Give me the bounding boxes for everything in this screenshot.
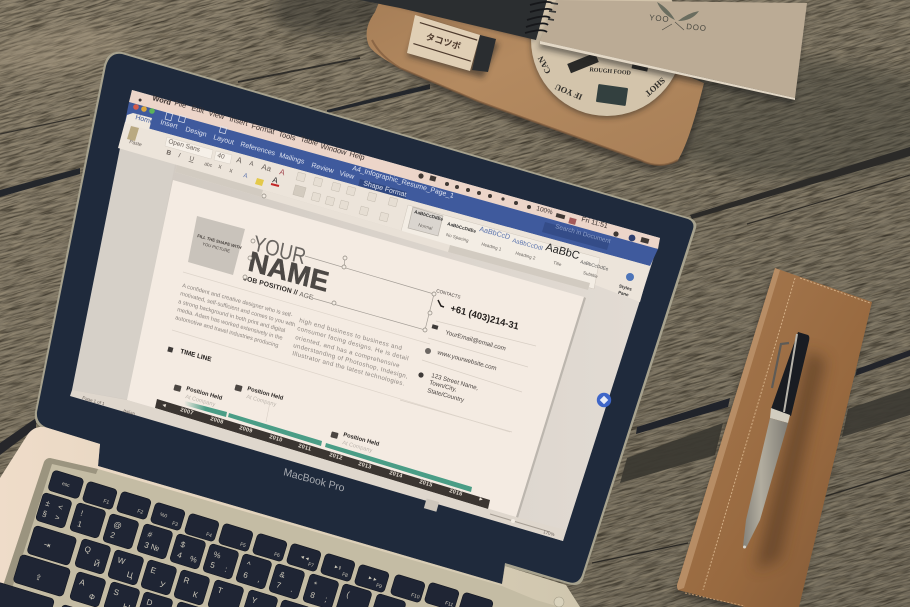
keyboard QWERTY row: У (159, 580, 167, 590)
ribbon toolbar: U (188, 155, 195, 163)
menu bar: Insert (228, 114, 250, 128)
keyboard number row (35, 492, 406, 607)
icon: eraser (407, 15, 499, 78)
blue ribbon title band: Design (184, 126, 207, 139)
intro paragraph right: oriented, and has a comprehensive (295, 334, 401, 370)
keyboard number row: 6 (242, 570, 250, 580)
status bar: 170% (543, 529, 555, 537)
coaster printed text: ROUGH FOOD (589, 67, 632, 77)
intro paragraph right (292, 317, 409, 388)
section heading: time line: TIME LINE (180, 348, 213, 364)
keyboard ASDF row: S (112, 587, 120, 598)
timeline chart: 2014 (388, 470, 404, 480)
name heading: AGE (299, 291, 314, 302)
photo placeholder: FILL THE SHAPE WITH (197, 233, 242, 250)
timeline chart (155, 384, 490, 509)
timeline positions: At Company (184, 394, 216, 408)
ribbon toolbar: Subtitle (582, 270, 599, 279)
intro paragraph left: automotive and travel industries producing (175, 315, 279, 349)
keyboard number row: % (189, 554, 198, 565)
keyboard number row: ( (345, 590, 351, 599)
keyboard number row: % (212, 550, 222, 560)
menu bar: Edit (190, 103, 206, 116)
ribbon toolbar: No Spacing (446, 232, 470, 243)
menu bar: Window (319, 141, 348, 157)
intro paragraph left: a strong background in both print and digital (178, 299, 286, 334)
photo placeholder (188, 216, 245, 275)
keyboard function row (47, 470, 494, 607)
menu bar: Table (299, 134, 319, 148)
keyboard QWERTY row: ⇥ (43, 540, 52, 550)
ribbon toolbar: A (271, 175, 280, 186)
contacts: www.yourwebsite.com (436, 349, 497, 372)
resume document content (155, 216, 536, 509)
blue ribbon title band: Search in Document (554, 223, 612, 245)
timeline chart: 2010 (268, 434, 283, 444)
panel: kraft card with logo (538, 0, 807, 105)
ribbon toolbar: AaBbCcDdEe (580, 259, 609, 272)
right page edge (516, 297, 586, 518)
ribbon toolbar: Home (134, 114, 154, 126)
menu bar (129, 90, 660, 249)
selection frame (243, 239, 436, 332)
keyboard QWERTY row: E (149, 565, 157, 576)
keyboard QWERTY row: Y (250, 595, 259, 606)
timeline chart: 2009 (238, 425, 253, 435)
contacts (400, 288, 536, 432)
contact dividers (400, 321, 536, 432)
status bar: Page 1 of 1 (82, 395, 106, 406)
ruler (175, 165, 590, 290)
keyboard number row: 7 (275, 580, 283, 590)
timeline positions: At Company (245, 394, 277, 408)
ribbon toolbar: Heading 1 (481, 241, 502, 252)
intro paragraph right: understanding of Photoshop, Indesign, (293, 342, 409, 380)
search box (542, 222, 610, 250)
keyboard function row: F5 (239, 542, 247, 549)
contacts: +61 (403)214-31 (449, 303, 520, 333)
timeline positions (173, 384, 380, 454)
ribbon toolbar: Title (553, 260, 563, 267)
intro paragraph right: high end business to business and (299, 317, 403, 352)
intro paragraph left: media. Adam has worked extensively in the (177, 307, 283, 342)
ribbon toolbar: A (235, 155, 244, 166)
timeline stem (266, 402, 270, 422)
keyboard number row: ± (44, 498, 52, 509)
menu bar: Fri 11:51 (580, 216, 609, 230)
keyboard shift row (0, 582, 91, 607)
keyboard function row: F2 (136, 508, 144, 516)
menu bar: File (173, 98, 188, 110)
ribbon toolbar: x (217, 163, 223, 171)
keyboard function row: F1 (102, 498, 110, 506)
ribbon toolbar: AaBbCcDdI (511, 238, 544, 252)
keyboard function row: F10 (410, 592, 420, 601)
keyboard QWERTY row: T (216, 585, 224, 596)
contacts: CONTACTS (436, 288, 461, 300)
intro paragraph left: A confident and creative designer who is self- (182, 283, 293, 319)
shape format tab (358, 179, 407, 200)
ribbon toolbar: B (165, 149, 172, 157)
icon: dropbox badge (597, 393, 611, 407)
name heading: YOUR (251, 230, 308, 269)
keyboard number row: & (278, 570, 287, 580)
keyboard function row: F9 (375, 583, 383, 590)
menu bar: Help (348, 149, 366, 162)
icon: black spiral notebook (338, 0, 547, 40)
intro paragraph right: Illustrator and the latest technologies. (292, 350, 405, 388)
keyboard number row: ; (324, 595, 328, 604)
status bar (70, 390, 566, 541)
left margin (72, 148, 175, 400)
timeline chart: ► (477, 496, 485, 504)
screen (72, 90, 660, 541)
keyboard function row: F4 (205, 532, 213, 539)
ribbon toolbar: AaBbC (544, 241, 581, 262)
keyboard number row: @ (112, 520, 123, 531)
keyboard number row: 1 (76, 519, 84, 529)
keyboard function row: F8 (341, 572, 349, 579)
timeline chart: 2007 (179, 407, 194, 417)
blue ribbon title band (125, 102, 658, 266)
keyboard number row: 5 (209, 560, 217, 570)
blue ribbon title band: View (338, 170, 356, 181)
menu bar: ● (138, 97, 142, 104)
keyboard QWERTY row (27, 525, 311, 607)
coaster printed text: CAN (535, 54, 553, 76)
timeline chart: 2011 (297, 443, 312, 453)
ribbon toolbar: AaBbCcDdEe (447, 221, 477, 234)
font box (165, 137, 213, 159)
timeline chart: 2012 (328, 452, 343, 462)
timeline chart: 2008 (209, 416, 224, 426)
icon: power button (554, 597, 564, 607)
paragraph tools (293, 172, 398, 222)
keyboard function row: F3 (171, 521, 179, 528)
ribbon toolbar: Styles (618, 283, 633, 292)
keyboard QWERTY row: R (182, 575, 191, 586)
keyboard QWERTY row: Q (83, 544, 92, 555)
ribbon toolbar: Pane (618, 290, 630, 298)
ribbon toolbar: A (248, 160, 255, 168)
section heading: time line (167, 347, 213, 364)
menu bar: View (207, 108, 226, 121)
logo: yoo doo: YOO (649, 13, 670, 24)
ribbon toolbar: I (177, 152, 181, 159)
paste icon (127, 126, 139, 141)
ribbon toolbar: x (228, 167, 234, 175)
keyboard number row: , (257, 575, 261, 584)
ribbon toolbar: Aa (260, 162, 273, 174)
coaster printed text (535, 53, 667, 106)
timeline positions: Position Held (246, 386, 284, 402)
ribbon toolbar: 40 (216, 152, 226, 161)
keyboard function row: F6 (273, 552, 281, 559)
keyboard function row: %0 (159, 512, 168, 520)
keyboard number row: > (54, 513, 61, 523)
timeline chart: ◄ (160, 402, 168, 410)
timeline chart: 2015 (418, 479, 433, 489)
intro paragraph left: motivated, self-sufficient and comes to you with (180, 291, 296, 329)
blue ribbon title band: Insert (159, 119, 178, 131)
keyboard ASDF row (13, 554, 207, 607)
contacts: State/Country (426, 387, 466, 404)
logo: yoo doo: DOO (686, 22, 707, 33)
ribbon toolbar: abc (203, 161, 213, 169)
ribbon toolbar (118, 113, 650, 302)
keyboard ASDF row: A (78, 577, 87, 588)
contacts: 123 Street Name, (430, 372, 479, 392)
menu bar: Tools (277, 129, 297, 143)
keyboard function row: ►‖ (333, 564, 341, 572)
panel: laptop base (0, 427, 580, 607)
keyboard function row: esc (61, 481, 71, 489)
keyboard QWERTY row: Ц (126, 570, 134, 580)
ribbon toolbar: A (242, 172, 249, 180)
word window background (72, 90, 660, 541)
timeline positions: Position Held (185, 386, 223, 402)
keyboard number row: 3 № (143, 540, 161, 553)
blue ribbon title band: References (239, 141, 276, 158)
timeline chart: 2013 (357, 461, 372, 471)
ribbon toolbar: Heading 2 (515, 250, 536, 261)
icon: eraser: タコツボ (425, 31, 462, 52)
keyboard number row: : (224, 565, 228, 574)
keyboard number row: < (57, 502, 64, 512)
icon: pen (743, 332, 826, 570)
document page (127, 180, 584, 517)
menu bar: Word (151, 93, 173, 107)
keyboard function row: ◄◄ (299, 554, 310, 563)
green bars (184, 401, 227, 417)
keyboard number row: 8 (309, 590, 317, 600)
timeline positions: At Company (341, 440, 373, 454)
keyboard number row: $ (179, 540, 187, 550)
keyboard QWERTY row: К (192, 590, 199, 600)
dividers (172, 272, 510, 432)
ribbon toolbar: A (278, 167, 287, 178)
keyboard QWERTY row: Й (93, 559, 101, 569)
photo placeholder: YOU PICTURE (202, 241, 231, 254)
logo: yoo doo (649, 2, 707, 33)
keyboard number row: ! (79, 509, 84, 518)
blue ribbon title band: Mailings (278, 152, 306, 166)
menu bar: 100% (535, 205, 554, 216)
contact icons (418, 300, 444, 378)
keyboard ASDF row: ⇪ (34, 572, 43, 583)
contacts: YourEmail@email.com (444, 329, 507, 353)
ribbon toolbar: Paste (128, 139, 143, 148)
keyboard function row: ►► (367, 575, 378, 584)
keyboard QWERTY row: W (116, 555, 127, 566)
ribbon toolbar: Open Sans (167, 138, 201, 154)
contacts: Town/City, (428, 379, 458, 394)
intro paragraph left (175, 283, 296, 349)
panel: coaster (531, 0, 683, 118)
ribbon toolbar: AaBbCcD (478, 224, 511, 241)
keyboard number row: 4 (176, 550, 184, 560)
panel: leather pen case (676, 268, 872, 607)
keyboard ASDF row: Ф (88, 592, 96, 602)
menu bar: Format (250, 121, 277, 137)
keyboard number row: . (290, 585, 294, 594)
timeline positions: Position Held (342, 432, 380, 448)
coaster printed text: SHOT (643, 76, 667, 99)
name heading: JOB POSITION // (243, 275, 298, 297)
coaster printed text: IF YOU (553, 82, 584, 102)
panel: laptop lid (35, 52, 696, 585)
keyboard number row: 2 (109, 530, 117, 540)
dark year bar (155, 399, 490, 509)
keyboard function row: F7 (307, 562, 315, 569)
panel: leather pouch (367, 0, 706, 171)
brand label: MacBook Pro (282, 466, 346, 495)
blue ribbon title band: Layout (212, 134, 235, 147)
keyboard well (0, 458, 560, 607)
keyboard number row: * (312, 580, 318, 589)
ribbon toolbar: Normal (418, 222, 433, 231)
timeline chart: 2016 (448, 488, 463, 498)
keyboard number row: § (41, 509, 48, 519)
menu status icons (418, 173, 649, 244)
blue ribbon title band: A4_Infographic_Resume_Page_1 (351, 165, 455, 200)
icon: notebook spiral binding (525, 2, 558, 33)
blue ribbon title band: Review (310, 162, 335, 175)
ribbon toolbar: AaBbCcDdEe (414, 209, 444, 222)
name heading: NAME (246, 246, 332, 298)
status bar: Italian (123, 408, 136, 416)
home tab (125, 113, 152, 130)
blue ribbon title band: Shape Format (362, 180, 407, 199)
keyboard number row: ^ (245, 560, 252, 570)
intro paragraph right: consumer facing designs. He is detail (297, 325, 409, 363)
keyboard number row: # (146, 530, 154, 540)
style gallery (400, 205, 600, 289)
